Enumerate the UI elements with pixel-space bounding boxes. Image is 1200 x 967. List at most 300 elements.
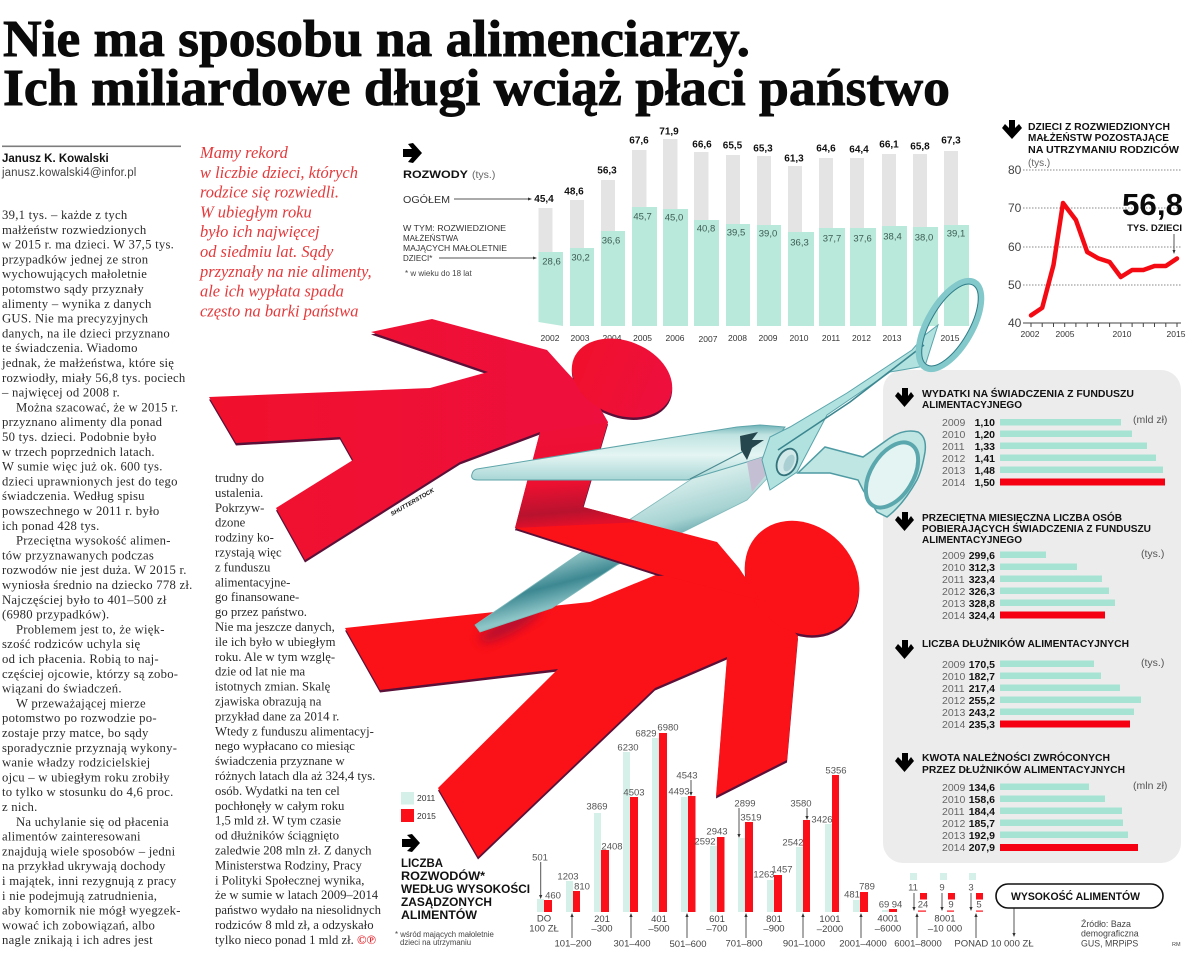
row labels: 2010 bbox=[942, 794, 966, 806]
article text: first column: te świadczenia. Wiadomo bbox=[2, 341, 138, 355]
title: Ich miliardowe długi wciąż płaci państwo bbox=[3, 60, 950, 117]
year axis labels: 2011 bbox=[822, 333, 840, 343]
row labels bbox=[942, 417, 995, 489]
pull quote: Mamy rekord bbox=[199, 143, 289, 162]
values: with children: 30,2 bbox=[571, 252, 590, 264]
article text: second column: alimentacyjne- bbox=[215, 575, 290, 589]
bar values: 6829 bbox=[635, 728, 657, 740]
scissors lower blade bbox=[475, 457, 775, 632]
row labels: 2011 bbox=[942, 441, 965, 453]
bar values: 4493 bbox=[668, 786, 690, 798]
values: total: 56,3 bbox=[597, 166, 617, 176]
year axis labels: 2013 bbox=[883, 333, 902, 343]
row labels: 207,9 bbox=[969, 842, 995, 854]
figure 1 shadow bbox=[209, 322, 684, 562]
values: total: 61,3 bbox=[784, 154, 804, 164]
icon: right arrow bbox=[402, 834, 420, 852]
heading bbox=[401, 856, 530, 922]
pull quote: rodzice się rozwiedli. bbox=[200, 183, 339, 202]
category labels: 8001 bbox=[934, 914, 956, 924]
category labels bbox=[529, 914, 1034, 950]
title: Nie ma sposobu na alimenciarzy. bbox=[3, 11, 750, 68]
values: with children: 40,8 bbox=[697, 224, 715, 234]
heading bbox=[922, 751, 1125, 776]
title bbox=[3, 11, 950, 117]
callout 56,8: 56,8 bbox=[1122, 187, 1183, 222]
article text: first column: dzieci uprawnionych jest do tego bbox=[2, 474, 178, 488]
heading: WEDŁUG WYSOKOŚCI bbox=[401, 881, 530, 896]
source bbox=[1081, 919, 1139, 948]
bar values: 2899 bbox=[734, 798, 756, 810]
values: with children: 37,7 bbox=[823, 234, 841, 244]
article text: first column: przypadków jednej ze stron bbox=[2, 252, 149, 266]
article text: first column: danych, na ile dzieci przyznano bbox=[2, 326, 170, 340]
article text: first column: Problemem jest to, że więk- bbox=[16, 622, 165, 636]
scissors upper handle bbox=[762, 272, 994, 490]
article text: second column: ustalenia. bbox=[215, 486, 263, 500]
bar values: 9 bbox=[948, 900, 954, 910]
label: ogółem bbox=[403, 193, 532, 206]
article text: first column: potomstwo po rozwodzie po- bbox=[2, 711, 157, 725]
article text: second column: 1,5 mld zł. W tym czasie bbox=[215, 814, 341, 828]
year axis labels bbox=[541, 333, 960, 344]
row labels: 2014 bbox=[942, 610, 966, 622]
y axis labels: 70 bbox=[1008, 201, 1022, 215]
y axis labels: 40 bbox=[1008, 316, 1022, 330]
bar values: 24 bbox=[918, 900, 928, 910]
label: w tym rozwiedzione: MAJĄCYCH MAŁOLETNIE bbox=[403, 244, 507, 253]
heading bbox=[922, 387, 1134, 411]
row labels: 2010 bbox=[942, 671, 966, 683]
article text: first column: GUS. Nie ma precyzyjnych bbox=[2, 312, 149, 326]
bar values: 2542 bbox=[782, 838, 804, 848]
article text: second column: dzie od lat nie ma bbox=[215, 665, 306, 679]
bar values: 2943 bbox=[706, 826, 728, 838]
article text: second column: rzystają więc bbox=[215, 546, 282, 560]
x axis labels: 2005 bbox=[1056, 329, 1075, 339]
article text: first column: jednak, że małżeństwa, które się bbox=[1, 356, 174, 370]
row labels: 324,4 bbox=[969, 610, 995, 622]
scissors blade hinge detail bbox=[690, 432, 770, 492]
heading: WYDATKI NA ŚWIADCZENIA Z FUNDUSZU bbox=[922, 387, 1134, 400]
article text: first column: wychowujących małoletnie bbox=[2, 267, 147, 281]
y axis labels: 50 bbox=[1008, 278, 1022, 292]
leader arrows bbox=[539, 780, 1016, 938]
row labels: 170,5 bbox=[969, 659, 995, 671]
article text: second column: Wtedy z funduszu alimentacyj- bbox=[215, 724, 374, 738]
bar values: 1203 bbox=[557, 872, 579, 882]
year axis labels: 2007 bbox=[699, 334, 718, 344]
bar values: 481 bbox=[844, 890, 860, 900]
year axis labels: 2009 bbox=[759, 333, 778, 343]
row labels: 1,48 bbox=[975, 465, 995, 477]
row labels: 243,2 bbox=[969, 707, 995, 719]
row labels: 2012 bbox=[942, 453, 966, 465]
article text: second column: roku. Ale w tym wzglę- bbox=[215, 650, 335, 664]
category labels: –700 bbox=[706, 924, 728, 934]
row labels: 326,3 bbox=[969, 586, 995, 598]
article text: second column: i Polityki Społecznej wynika, bbox=[215, 873, 364, 887]
row labels: 2014 bbox=[942, 477, 966, 489]
unit: (mld zł) bbox=[1133, 414, 1167, 426]
scissors pivot bbox=[772, 445, 802, 479]
label: w tym rozwiedzione: DZIECI* bbox=[403, 254, 432, 263]
row labels: 2010 bbox=[942, 562, 966, 574]
bar values: 501 bbox=[532, 852, 548, 864]
values: with children: 39,1 bbox=[947, 228, 965, 240]
row labels bbox=[942, 782, 995, 854]
article text: second column: zjawiska obrazują na bbox=[215, 694, 322, 708]
byline: janusz.kowalski4@infor.pl bbox=[1, 167, 136, 179]
row labels: 2013 bbox=[942, 830, 966, 842]
values: total: 67,6 bbox=[629, 136, 649, 146]
label: w tym rozwiedzione bbox=[403, 224, 537, 278]
article text: second column: ile ich było w ubiegłym bbox=[215, 635, 336, 649]
category labels: 6001–8000 bbox=[894, 938, 942, 950]
category labels: 801 bbox=[766, 914, 782, 925]
article text: first column: nagle znikają i ich adres jest bbox=[2, 933, 153, 947]
year axis labels: 2002 bbox=[541, 333, 560, 343]
article text: first column: szość rodziców uchyla się bbox=[2, 637, 140, 651]
heading: LICZBA bbox=[401, 856, 443, 870]
bars 2015 bbox=[544, 733, 983, 912]
bar values: 6230 bbox=[617, 742, 639, 754]
article text: first column: zostaje przy matce, bo sądy bbox=[2, 726, 149, 740]
bars bbox=[1000, 419, 1165, 486]
article text: second column: świadczenia przyznane w bbox=[215, 754, 345, 768]
unit: (mln zł) bbox=[1133, 780, 1167, 792]
section: liczba dłużników bbox=[895, 637, 1164, 731]
row labels: 2009 bbox=[942, 417, 966, 429]
pull quote: w liczbie dzieci, których bbox=[200, 163, 358, 182]
values: with children: 39,5 bbox=[727, 228, 745, 238]
article text: first column: W sumie więc już ok. 600 tys. bbox=[2, 460, 163, 474]
footnote: dzieci na utrzymaniu bbox=[400, 938, 471, 947]
article text: first column: W przeważającej mierze bbox=[16, 696, 146, 710]
article text: second column: nego wypłacano co miesiąc bbox=[215, 739, 355, 753]
row labels: 2013 bbox=[942, 465, 966, 477]
article text: second column: Ministerstwa Rodziny, Pracy bbox=[215, 858, 362, 872]
article text: first column: od ich płacenia. Robią to naj- bbox=[2, 652, 159, 666]
panel: fund statistics bbox=[883, 370, 1181, 863]
article text: second column: rodziny ko- bbox=[215, 531, 274, 545]
heading: NA UTRZYMANIU RODZICÓW bbox=[1028, 143, 1180, 156]
article text: second column: trudny do bbox=[215, 471, 264, 485]
bar values: 5 bbox=[976, 900, 982, 910]
illustration: paper figures and scissors bbox=[209, 272, 994, 860]
article text: second column: państwo wydało na niesolidnych bbox=[215, 903, 382, 917]
row labels: 299,6 bbox=[969, 550, 995, 562]
bar values: 3580 bbox=[790, 798, 812, 810]
row labels: 182,7 bbox=[969, 671, 995, 683]
article text: first column: (6980 przypadków). bbox=[2, 608, 109, 622]
row labels: 1,33 bbox=[975, 441, 995, 453]
bar values: 1457 bbox=[771, 864, 793, 876]
values: total: 67,3 bbox=[941, 136, 961, 146]
pull quote: często na barki państwa bbox=[200, 301, 358, 320]
values: with children: 37,6 bbox=[853, 234, 872, 244]
article text: first column: alimenty – wynika z danych bbox=[2, 297, 152, 311]
gray bars: total bbox=[538, 139, 958, 254]
legend: 2011 bbox=[417, 793, 436, 803]
byline bbox=[1, 146, 181, 179]
pull quote: ale ich wypłata spada bbox=[200, 282, 344, 301]
row labels: 312,3 bbox=[969, 562, 995, 574]
category labels: 301–400 bbox=[614, 938, 650, 950]
category labels: 100 ZŁ bbox=[529, 924, 559, 934]
year axis labels: 2006 bbox=[666, 333, 685, 343]
article text: first column: wiązani do świadczeń. bbox=[2, 682, 122, 696]
pull quote: przyznały na nie alimenty, bbox=[199, 262, 372, 281]
teal bars: with children bbox=[538, 207, 969, 326]
row labels: 235,3 bbox=[969, 719, 995, 731]
source: GUS, MRPiPS bbox=[1081, 938, 1138, 948]
bars bbox=[1000, 552, 1115, 618]
article text: second column: istotnych zmian. Skalę bbox=[215, 680, 331, 694]
icon: down arrow bbox=[1002, 120, 1022, 139]
article text: first column: i majątek, inni rezygnują z pracy bbox=[2, 874, 177, 888]
unit: (tys.) bbox=[1141, 548, 1164, 560]
x axis labels: 2002 bbox=[1021, 329, 1040, 339]
pull quote: W ubiegłym roku bbox=[200, 202, 312, 221]
bar values: 789 bbox=[859, 882, 875, 892]
article text: first column: w 2015 r. ma dzieci. W 37,5 tys. bbox=[2, 238, 174, 252]
figure 2 bbox=[345, 497, 883, 857]
values: with children: 38,4 bbox=[883, 232, 902, 242]
category labels: 501–600 bbox=[670, 939, 706, 950]
bar values: 3426 bbox=[811, 814, 833, 826]
values: total bbox=[534, 126, 961, 205]
row labels: 184,4 bbox=[969, 806, 995, 818]
values: with children: 45,0 bbox=[665, 212, 683, 224]
article text: first column: ojcu – w ubiegłym roku zrobiły bbox=[2, 770, 170, 784]
figure 1 bbox=[209, 319, 684, 560]
article text: first column: wanie władzy rodzicielskiej bbox=[2, 756, 150, 770]
row labels: 1,20 bbox=[975, 429, 995, 441]
bar values: 3519 bbox=[740, 812, 762, 824]
article text: first column: przyznano alimenty dla ponad bbox=[2, 415, 163, 429]
pull quote: było ich najwięcej bbox=[200, 222, 320, 241]
byline: Janusz K. Kowalski bbox=[2, 153, 109, 165]
values: total: 65,8 bbox=[910, 142, 930, 152]
category labels: 401 bbox=[651, 914, 667, 925]
row labels: 2012 bbox=[942, 695, 966, 707]
article text: first column: częściej ojcowie, którzy są zobo- bbox=[2, 667, 178, 681]
credit: shutterstock: SHUTTERSTOCK bbox=[390, 488, 436, 518]
category labels: 1001 bbox=[819, 914, 841, 925]
icon: down arrow bbox=[895, 512, 914, 531]
bar values: 3 bbox=[968, 882, 974, 894]
row labels: 323,4 bbox=[969, 574, 995, 586]
category labels: –300 bbox=[591, 924, 613, 934]
row labels: 192,9 bbox=[969, 830, 995, 842]
row labels: 217,4 bbox=[969, 683, 995, 695]
values: with children: 38,0 bbox=[915, 232, 933, 244]
heading: POBIERAJĄCYCH ŚWIADCZENIA Z FUNDUSZU bbox=[922, 522, 1151, 535]
heading bbox=[1028, 122, 1180, 169]
article text: second column: z funduszu bbox=[215, 560, 271, 574]
article text: second column: osób. Wydatki na ten cel bbox=[215, 784, 340, 798]
line bbox=[1031, 203, 1177, 315]
article text: first column: Na uchylanie się od płacenia bbox=[16, 815, 169, 829]
scissors upper blade bbox=[472, 425, 785, 480]
bar values: 810 bbox=[574, 882, 590, 892]
row labels: 1,41 bbox=[975, 453, 995, 465]
heading: (tys.) bbox=[1028, 158, 1050, 169]
year axis labels: 2012 bbox=[852, 333, 871, 343]
heading bbox=[922, 511, 1151, 546]
bars bbox=[1000, 660, 1141, 728]
footnote bbox=[395, 930, 494, 947]
category labels: 201 bbox=[594, 914, 610, 925]
article text: first column: sporadycznie przyznają wykony- bbox=[2, 741, 177, 755]
article text: second column: dzone bbox=[215, 516, 246, 530]
article text: first column: aby komornik nie mógł wyegzek- bbox=[2, 904, 181, 918]
bar values: 3869 bbox=[586, 802, 608, 812]
category labels: PONAD 10 000 ZŁ bbox=[954, 938, 1034, 950]
heading: LICZBA DŁUŻNIKÓW ALIMENTACYJNYCH bbox=[922, 637, 1129, 650]
heading: ALIMENTÓW bbox=[401, 907, 477, 922]
values: total: 48,6 bbox=[564, 186, 584, 198]
figure 2 shadow bbox=[345, 500, 883, 860]
article text: first column: powszechnego w 2011 r. było bbox=[2, 504, 159, 518]
axis pill: wysokość alimentów: WYSOKOŚĆ ALIMENTÓW bbox=[1011, 890, 1141, 903]
icon: down arrow bbox=[895, 753, 914, 772]
row labels: 2009 bbox=[942, 550, 966, 562]
article text: first column: tów przyznawanych podczas bbox=[2, 548, 154, 562]
bar values: 1263 bbox=[753, 870, 775, 880]
section: liczba osób bbox=[895, 511, 1164, 622]
category labels: –2000 bbox=[817, 924, 843, 935]
row labels: 2010 bbox=[942, 429, 966, 441]
article text: first column: wyniosła średnio na dziecko 778 zł. bbox=[2, 578, 193, 592]
values: total: 64,6 bbox=[816, 144, 836, 154]
article text: second column: przykład dane za 2014 r. bbox=[215, 709, 339, 723]
heading: PRZECIĘTNA MIESIĘCZNA LICZBA OSÓB bbox=[922, 511, 1122, 524]
bar values: 5356 bbox=[825, 766, 847, 776]
heading: KWOTA NALEŻNOŚCI ZWRÓCONYCH bbox=[922, 751, 1110, 764]
article text: first column: małżeństw rozwiedzionych bbox=[2, 223, 147, 237]
icon: right arrow rozwody bbox=[403, 143, 422, 163]
bar values: 4503 bbox=[623, 788, 645, 798]
values: with children: 36,3 bbox=[790, 238, 809, 248]
year axis labels: 2005 bbox=[633, 333, 652, 343]
y axis labels bbox=[1008, 163, 1022, 330]
label: w tym rozwiedzione: W TYM: ROZWIEDZIONE bbox=[403, 224, 506, 233]
row labels: 158,6 bbox=[969, 794, 995, 806]
x axis labels: 2015 bbox=[1167, 329, 1186, 339]
heading: rozwody bbox=[403, 169, 495, 181]
row labels bbox=[942, 659, 995, 731]
category labels: 901–1000 bbox=[783, 938, 825, 950]
article text: first column: Najczęściej było to 401–500 zł bbox=[2, 593, 167, 607]
row labels: 255,2 bbox=[969, 695, 995, 707]
connecting arm over blade bbox=[515, 422, 760, 600]
article text: second column: pochłonęły w całym roku bbox=[215, 799, 345, 813]
article text: second column: różnych latach dla aż 324,4 tys. bbox=[215, 769, 375, 783]
chart: children line chart bbox=[1002, 120, 1186, 339]
blade shadow bbox=[476, 602, 544, 648]
row labels bbox=[942, 550, 995, 622]
article text: first column: znajdują wiele sposobów – jedni bbox=[2, 844, 176, 858]
heading: ZASĄDZONYCH bbox=[401, 895, 492, 909]
year axis labels: 2004 bbox=[603, 333, 622, 343]
row labels: 2009 bbox=[942, 659, 966, 671]
bar values: 4543 bbox=[676, 770, 698, 782]
x axis labels: 2010 bbox=[1113, 329, 1132, 339]
row labels: 134,6 bbox=[969, 782, 995, 794]
heading: ROZWODÓW* bbox=[401, 868, 485, 883]
author initials: RM bbox=[1172, 942, 1181, 948]
values: total: 66,6 bbox=[692, 140, 712, 150]
row labels: 1,10 bbox=[975, 417, 995, 429]
row labels: 2012 bbox=[942, 586, 966, 598]
label: w tym rozwiedzione: * w wieku do 18 lat bbox=[405, 269, 472, 278]
source: demograficzna bbox=[1081, 928, 1139, 938]
row labels: 2012 bbox=[942, 818, 966, 830]
article text: first column: 39,1 tys. – każde z tych bbox=[2, 208, 128, 222]
category labels: 601 bbox=[709, 914, 725, 925]
category labels: 101–200 bbox=[555, 938, 591, 950]
category labels: DO bbox=[537, 914, 551, 924]
article text: second column: rodziców 8 mld zł, a odzyskało bbox=[215, 918, 374, 932]
heading: rozwody: ROZWODY bbox=[403, 169, 469, 181]
values: with children: 36,6 bbox=[602, 236, 620, 246]
article text: first column: świadczenia. Według spisu bbox=[2, 489, 145, 503]
chart: divorces by alimony amount bbox=[395, 722, 1163, 950]
article text: second column: że w sumie w latach 2009–2014 bbox=[215, 888, 379, 902]
article text: first column: rozwodów nie jest duża. W 2015 r. bbox=[2, 563, 187, 577]
values: with children: 28,6 bbox=[542, 256, 561, 268]
article text: second column: Nie ma jeszcze danych, bbox=[215, 620, 335, 634]
bar values: 460 bbox=[545, 890, 561, 902]
category labels: 701–800 bbox=[726, 938, 762, 950]
heading: PRZEZ DŁUŻNIKÓW ALIMENTACYJNYCH bbox=[922, 763, 1125, 776]
article text: first column: 50 tys. dzieci. Podobnie było bbox=[2, 430, 157, 444]
values: with children: 45,7 bbox=[633, 212, 652, 222]
values: total: 71,9 bbox=[659, 126, 679, 138]
heading: DZIECI Z ROZWIEDZIONYCH bbox=[1028, 122, 1170, 133]
y axis labels: 60 bbox=[1008, 240, 1022, 254]
label: w tym rozwiedzione: MAŁŻEŃSTWA bbox=[403, 234, 459, 243]
article text: first column: – najwięcej od 2008 r. bbox=[1, 386, 120, 400]
article text: first column: z nich. bbox=[2, 800, 38, 814]
year axis labels: 2003 bbox=[571, 333, 590, 343]
scissors lower handle bbox=[798, 431, 929, 517]
row labels: 2014 bbox=[942, 719, 966, 731]
heading: ALIMENTACYJNEGO bbox=[922, 535, 1022, 546]
x axis labels bbox=[1021, 329, 1186, 339]
bar values bbox=[532, 722, 982, 910]
y axis labels: 80 bbox=[1008, 163, 1022, 177]
values: with children: 39,0 bbox=[759, 228, 777, 240]
row labels: 2011 bbox=[942, 806, 965, 818]
bar values: 6980 bbox=[657, 722, 679, 734]
article text: second column: zaledwie 208 mln zł. Z danych bbox=[215, 843, 372, 857]
values: with children bbox=[542, 212, 965, 268]
article text: second column: od dłużników ściągnięto bbox=[215, 829, 339, 843]
values: total: 65,5 bbox=[723, 140, 743, 152]
icon: down arrow bbox=[895, 640, 914, 659]
unit: (tys.) bbox=[1141, 657, 1164, 669]
category labels: –900 bbox=[763, 924, 785, 934]
callout 56,8 bbox=[1122, 187, 1183, 254]
article text: first column: w trzech poprzednich latach. bbox=[2, 445, 155, 459]
article text: first column: na przykład ukrywają dochody bbox=[2, 859, 166, 873]
heading: rozwody: (tys.) bbox=[472, 169, 495, 181]
bar values: 9 bbox=[939, 882, 945, 894]
row labels: 2009 bbox=[942, 782, 966, 794]
